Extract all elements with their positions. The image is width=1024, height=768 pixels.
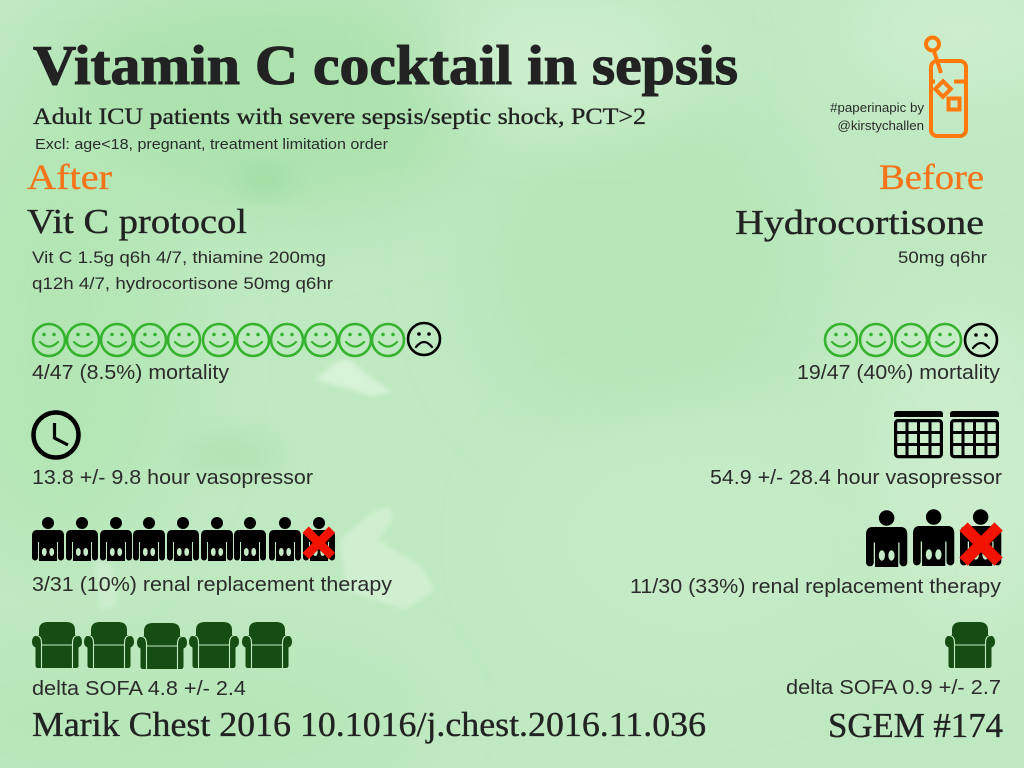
right mortality label: 19/47 (40%) mortality [797,361,1001,384]
credit: paperinapic: #paperinapic by [830,100,924,115]
icon: two calendars [894,411,999,457]
left vasopressor label: 13.8 +/- 9.8 hour vasopressor [32,466,313,489]
right kidney patients row [866,509,1001,567]
right renal label: 11/30 (33%) renal replacement therapy [630,575,1002,598]
subtitle: population: Adult ICU patients with severe sepsis/septic shock, PCT>2 [33,104,646,129]
left mortality label: 4/47 (8.5%) mortality [32,361,230,384]
title: Vitamin C cocktail in sepsis [33,35,738,97]
icon: clock [34,412,78,458]
left protocol details: q12h 4/7, hydrocortisone 50mg q6hr [32,274,333,293]
left mortality faces [33,323,440,356]
left protocol details: Vit C 1.5g q6h 4/7, thiamine 200mg [32,248,326,267]
episode tag: SGEM #174 [828,706,1003,745]
left kidney patients row [32,517,335,561]
credit: paperinapic: @kirstychallen [837,118,924,133]
icon: red cross [306,530,332,556]
left renal label: 3/31 (10%) renal replacement therapy [32,573,393,596]
left protocol details [32,248,333,293]
right vasopressor label: 54.9 +/- 28.4 hour vasopressor [710,466,1002,489]
exclusion criteria: Excl: age<18, pregnant, treatment limitation order [35,136,388,153]
right column heading: Before: Before [879,157,984,197]
right mortality faces [825,324,997,356]
icon: cocktail glass [926,38,966,136]
left armchairs row [32,622,292,669]
left column heading: After: After [27,157,112,197]
credit: paperinapic [830,100,924,133]
citation: Marik Chest 2016 10.1016/j.chest.2016.11.036 [32,705,706,744]
right protocol details: 50mg q6hr [898,248,987,267]
right SOFA label: delta SOFA 0.9 +/- 2.7 [786,676,1001,699]
icon: red cross right [964,527,999,562]
left SOFA label: delta SOFA 4.8 +/- 2.4 [32,677,246,700]
right intervention name: Hydrocortisone [735,203,984,242]
right armchair [945,622,995,668]
left intervention name: Vit C protocol [27,202,247,241]
